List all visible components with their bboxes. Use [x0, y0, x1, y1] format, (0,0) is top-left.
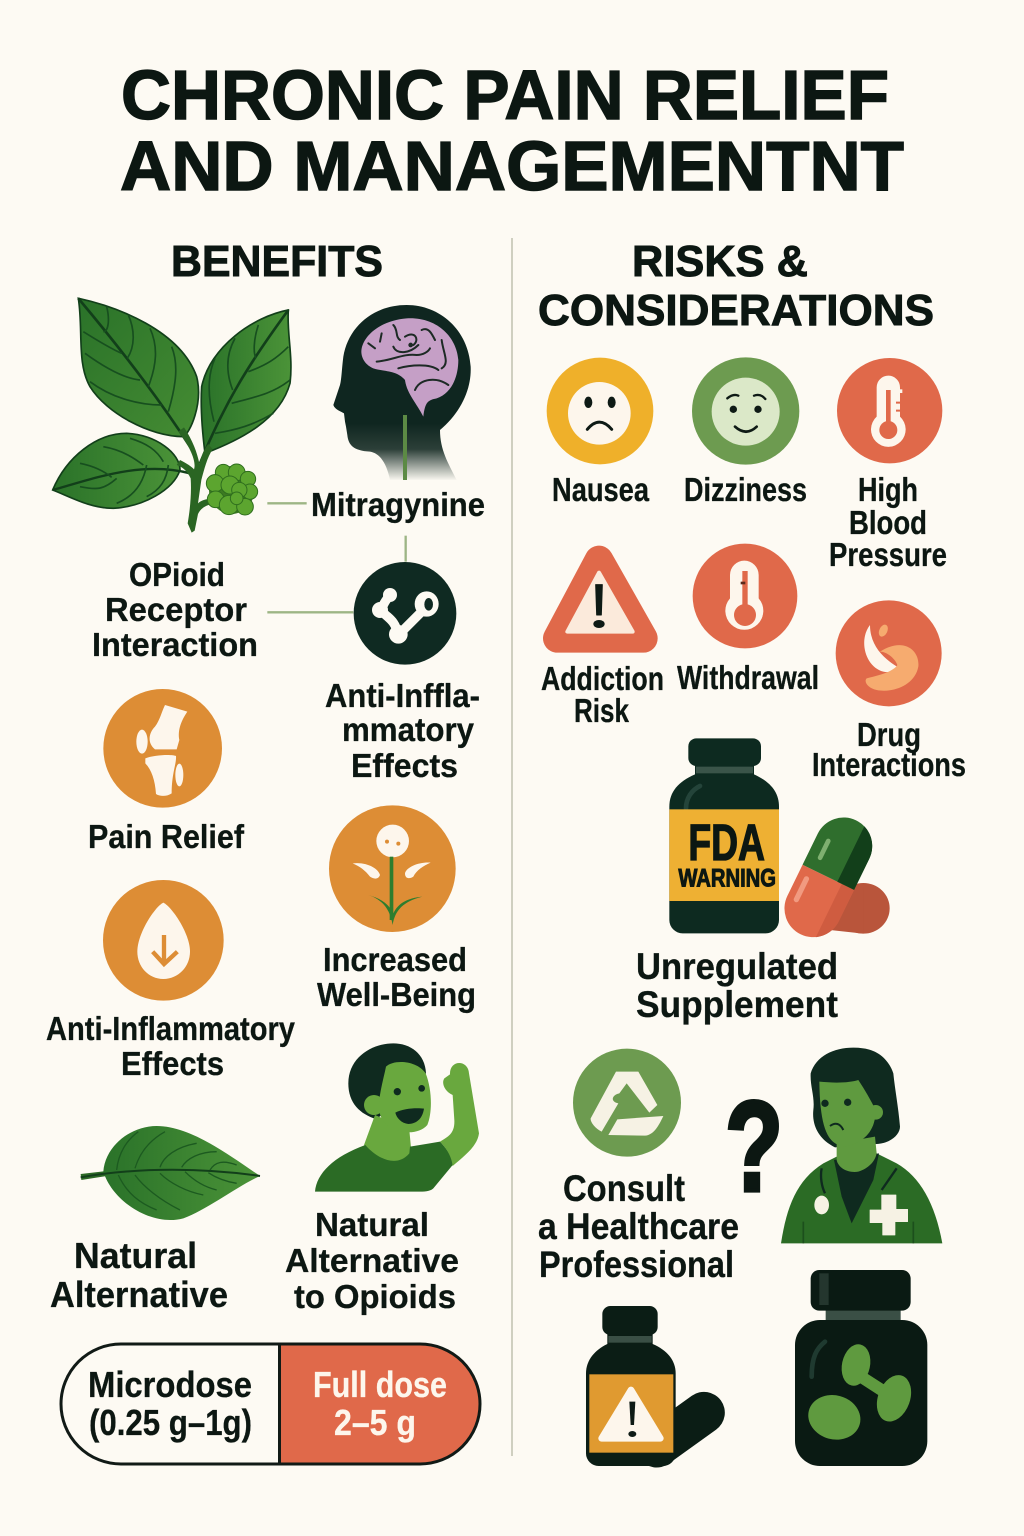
- icon: question mark: ?: [725, 1076, 783, 1219]
- heading: benefits: BENEFITS: [171, 237, 383, 286]
- icon: waving person: [315, 1043, 479, 1192]
- label: high blood pressure: Blood: [849, 504, 927, 541]
- label: consult a healthcare professional: Consult: [563, 1168, 685, 1209]
- dose: full dose label: 2–5 g: [334, 1402, 416, 1443]
- label: addiction risk: [541, 660, 664, 729]
- icon: molecule: [354, 562, 456, 665]
- icon: FDA warning bottle: FDA: [688, 814, 765, 871]
- icon: FDA warning bottle: [669, 738, 779, 933]
- icon: thermometer high blood pressure: [837, 358, 942, 463]
- label: opioid receptor interaction: Receptor: [105, 591, 247, 628]
- label: increased well-being: Well-Being: [317, 976, 476, 1013]
- icon: knee joint: [103, 689, 222, 808]
- label: nausea: Nausea: [552, 471, 650, 508]
- label: opioid receptor interaction: Interaction: [92, 626, 258, 663]
- icon: stomach drug interactions: [836, 600, 942, 706]
- label: unregulated supplement: Supplement: [636, 984, 838, 1025]
- icon: small warning bottle with capsule: [586, 1306, 704, 1466]
- icon: head with brain: [333, 305, 471, 480]
- label: anti-inflammatory effects (upper): Anti-Inffla-: [325, 677, 480, 714]
- label: addiction risk: Risk: [574, 692, 630, 729]
- label: Mitragynine: Mitragynine: [311, 486, 485, 523]
- label: consult a healthcare professional: Professional: [539, 1244, 734, 1285]
- panel: leaf and person: [81, 1043, 479, 1220]
- icon: green circle symbol: [573, 1049, 681, 1157]
- dose: microdose label: Microdose: [88, 1364, 252, 1405]
- panel: benefits top illustrations: [53, 298, 471, 665]
- label: drug interactions: Interactions: [812, 746, 966, 783]
- label: natural alternative: [50, 1235, 228, 1315]
- heading: risks and considerations: CONSIDERATIONS: [538, 286, 934, 335]
- dose: microdose label: [88, 1364, 252, 1443]
- label: natural alternative: Alternative: [50, 1274, 228, 1315]
- label: natural alternative: Natural: [74, 1235, 197, 1276]
- connector lines: [267, 503, 406, 612]
- title: CHRONIC PAIN RELIEF: [121, 56, 889, 134]
- label: anti-inflammatory effects (upper): [325, 677, 480, 784]
- label: high blood pressure: Pressure: [829, 536, 947, 573]
- label: pain relief: Pain Relief: [88, 818, 245, 855]
- label: withdrawal: Withdrawal: [677, 659, 819, 696]
- heading: risks and considerations: [538, 237, 934, 335]
- label: increased well-being: Increased: [323, 941, 467, 978]
- label: anti-inflammatory effects (lower): Effects: [121, 1045, 224, 1082]
- dose: full dose segment: [280, 1344, 480, 1464]
- icon: jar with kratom: [795, 1270, 927, 1466]
- panel: risk icons: [547, 357, 942, 706]
- label: high blood pressure: High: [858, 471, 918, 508]
- panel: FDA warning bottle and capsules: [669, 738, 890, 947]
- labels: benefits: [46, 818, 476, 1315]
- label: opioid receptor interaction: OPioid: [129, 556, 225, 593]
- label: natural alternative to opioids: Alternative: [285, 1242, 459, 1279]
- label: natural alternative to opioids: to Opioids: [294, 1278, 456, 1315]
- label: unregulated supplement: [636, 946, 838, 1025]
- icon: warning triangle: [557, 560, 643, 638]
- label: anti-inflammatory effects (upper): Effects: [351, 747, 458, 784]
- label: high blood pressure: [829, 471, 947, 573]
- panel: consult and bottles: [573, 1048, 942, 1466]
- label: dizziness: Dizziness: [684, 471, 807, 508]
- labels: mechanism: [92, 486, 485, 784]
- label: opioid receptor interaction: [92, 556, 258, 663]
- label: unregulated supplement: Unregulated: [636, 946, 838, 987]
- icon: capsules: [775, 808, 890, 947]
- panel: benefits icons: [103, 689, 456, 1001]
- dose: full dose label: Full dose: [313, 1364, 447, 1405]
- label: drug interactions: [812, 716, 966, 783]
- icon: leaf: [81, 1126, 260, 1220]
- label: increased well-being: [317, 941, 476, 1013]
- icon: nausea face: [547, 358, 653, 464]
- label: natural alternative to opioids: [285, 1206, 459, 1315]
- icon: droplet with arrow: [103, 880, 224, 1001]
- label: anti-inflammatory effects (upper): mmatory: [342, 711, 475, 748]
- label: natural alternative to opioids: Natural: [315, 1206, 429, 1243]
- dose pill: [61, 1344, 480, 1464]
- label: consult a healthcare professional: a Healthcare: [538, 1206, 739, 1247]
- label: drug interactions: Drug: [857, 716, 921, 753]
- title: AND MANAGEMENTNT: [120, 127, 904, 205]
- label: addiction risk: Addiction: [541, 660, 664, 697]
- icon: flower: [329, 805, 456, 932]
- label: anti-inflammatory effects (lower): Anti-Inflammatory: [46, 1010, 296, 1047]
- label: anti-inflammatory effects (lower): [46, 1010, 296, 1082]
- icon: kratom plant: [53, 298, 291, 533]
- dose: full dose label: [313, 1364, 447, 1443]
- label: consult a healthcare professional: [538, 1168, 739, 1285]
- labels: risks: [538, 471, 966, 1285]
- icon: FDA warning bottle: WARNING: [678, 865, 776, 893]
- icon: dizziness face: [692, 357, 799, 465]
- icon: doctor: [781, 1048, 942, 1243]
- dose: microdose label: (0.25 g–1g): [89, 1402, 252, 1443]
- heading: risks and considerations: RISKS &: [632, 237, 808, 286]
- icon: thermometer withdrawal: [693, 544, 797, 648]
- title: [120, 56, 904, 205]
